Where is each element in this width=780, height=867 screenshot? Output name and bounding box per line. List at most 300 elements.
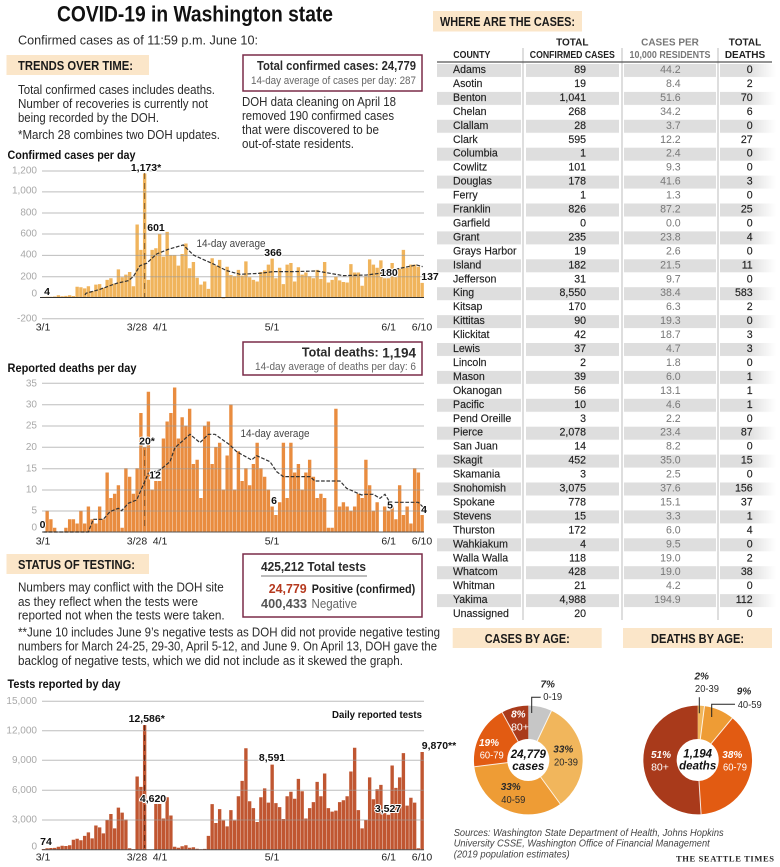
column: total deaths: 0 <box>747 580 753 592</box>
column: total confirmed cases: 89 <box>574 64 586 76</box>
y axis labels: 35 <box>26 378 37 390</box>
column: total deaths: 15 <box>741 455 753 467</box>
column: county names: Garfield <box>453 218 490 230</box>
y axis labels: 3,000 <box>12 814 37 826</box>
bar annotations: 366 <box>264 247 282 259</box>
column: total confirmed cases: 39 <box>574 371 586 383</box>
column: total deaths: 4 <box>747 231 753 243</box>
bar annotations: 0 <box>40 519 46 531</box>
text block: trends notes: Number of recoveries is currently not <box>18 97 208 111</box>
table header: COUNTY <box>453 50 491 61</box>
sources <box>454 827 724 860</box>
callout: total deaths: Total deaths: 1,194 <box>302 345 416 360</box>
column: total confirmed cases: 3 <box>580 413 586 425</box>
column: county names: Asotin <box>453 78 483 90</box>
column: total deaths: 3 <box>747 176 753 188</box>
text block: DOH data cleaning: DOH data cleaning on April 18 <box>242 95 396 109</box>
column: county names: Kitsap <box>453 301 483 313</box>
y axis labels: 600 <box>20 228 37 240</box>
callout: total confirmed cases <box>243 55 422 91</box>
bar annotations: Daily reported tests <box>332 709 422 721</box>
callout: total confirmed cases: Total confirmed cases: 24,779 <box>257 59 416 73</box>
column: total deaths: 3 <box>747 343 753 355</box>
column: cases per 10,000 residents: 12.2 <box>660 134 681 146</box>
column: total deaths: 2 <box>747 78 753 90</box>
column: total deaths: 37 <box>741 496 753 508</box>
column: total confirmed cases: 595 <box>568 134 586 146</box>
text block: testing notes: Numbers may conflict with the DOH site <box>18 581 224 595</box>
column: cases per 10,000 residents: 1.8 <box>666 357 681 369</box>
heading: deaths by age: DEATHS BY AGE: <box>651 631 744 646</box>
x axis labels <box>36 852 432 864</box>
callout: test totals: Positive (confirmed) <box>312 582 415 596</box>
column: cases per 10,000 residents: 6.3 <box>666 301 681 313</box>
slice labels: 33% <box>501 782 521 793</box>
x axis labels: 6/10 <box>412 536 432 548</box>
callout: test totals: 425,212 Total tests <box>261 560 366 574</box>
y axis labels: 12,000 <box>6 726 37 736</box>
y axis labels <box>6 696 37 852</box>
column: county names: Chelan <box>453 106 487 118</box>
slice labels: 19% <box>479 738 499 749</box>
table header: CONFIRMED CASES <box>530 50 615 61</box>
column: county names: Grays Harbor <box>453 245 517 257</box>
text block: trends notes: *March 28 combines two DOH updates. <box>18 128 220 142</box>
column: county names: Unassigned <box>453 608 509 620</box>
column: total deaths: 1 <box>747 371 753 383</box>
column: total deaths: 1 <box>747 385 753 397</box>
x axis labels <box>36 536 432 548</box>
y axis labels: -200 <box>17 314 37 324</box>
bar annotations: 601 <box>147 222 165 234</box>
column: total confirmed cases: 42 <box>574 329 586 341</box>
text block: footnote: numbers for March 24-25, 29-30, April 5-12, and June 9. On April 13, DOH gave the <box>18 640 437 654</box>
column: total deaths: 6 <box>747 106 753 118</box>
column: county names: Snohomish <box>453 482 506 494</box>
x axis labels: 5/1 <box>265 852 279 864</box>
column: total confirmed cases: 172 <box>568 524 586 536</box>
bar annotations: 137 <box>421 271 439 283</box>
bar annotations: 4 <box>421 504 427 516</box>
x axis labels: 4/1 <box>153 322 167 334</box>
donut center label: 1,194 <box>683 748 713 760</box>
y axis labels: 30 <box>26 400 37 410</box>
column: county names: Okanogan <box>453 385 502 397</box>
column: total deaths: 156 <box>735 482 753 494</box>
column: total confirmed cases: 19 <box>574 78 586 90</box>
slice labels: 51% <box>651 750 671 761</box>
column: total deaths: 11 <box>742 259 753 271</box>
x axis labels: 3/1 <box>36 852 50 864</box>
y axis labels: 200 <box>20 272 37 282</box>
column: county names: Adams <box>453 64 486 76</box>
column: total confirmed cases: 170 <box>568 301 586 313</box>
y axis labels: 0 <box>31 842 37 852</box>
slice labels: 60-79 <box>480 750 504 762</box>
column: cases per 10,000 residents: 8.4 <box>666 78 681 90</box>
column: total confirmed cases: 268 <box>568 106 586 118</box>
text block: DOH data cleaning: out-of-state residents. <box>242 137 354 151</box>
column: cases per 10,000 residents: 1.3 <box>666 190 681 202</box>
y axis labels: 1,200 <box>12 166 37 176</box>
column: total deaths: 0 <box>747 469 753 481</box>
column: total deaths: 0 <box>747 218 753 230</box>
bar annotations: 20* <box>139 436 156 448</box>
column: cases per 10,000 residents: 0.0 <box>666 218 681 230</box>
column: total deaths: 25 <box>741 204 753 216</box>
column: county names: Lincoln <box>453 357 487 369</box>
column: total confirmed cases: 4 <box>580 538 586 550</box>
sources: University CSSE, Washington Office of Financial Management <box>454 838 711 850</box>
heading: trends over time <box>6 55 149 75</box>
slice labels: 8% <box>511 710 526 720</box>
column: cases per 10,000 residents: 41.6 <box>660 176 681 188</box>
column: cases per 10,000 residents: 6.0 <box>666 524 681 536</box>
y axis labels: 5 <box>31 506 37 516</box>
column: county names: Yakima <box>453 594 488 606</box>
heading: where are the cases: WHERE ARE THE CASES: <box>440 14 575 29</box>
text block: testing notes: as they reflect when the tests were <box>18 595 198 609</box>
column: cases per 10,000 residents: 9.3 <box>666 162 681 174</box>
x axis labels: 6/1 <box>381 852 396 864</box>
column: cases per 10,000 residents: 23.4 <box>660 427 681 439</box>
y axis labels: 20 <box>26 442 37 453</box>
text block: trends notes: Total confirmed cases includes deaths. <box>18 83 215 97</box>
chart title: confirmed cases per day: Confirmed cases per day <box>8 148 136 162</box>
column: cases per 10,000 residents: 87.2 <box>660 204 681 216</box>
bar annotations: 1,173* <box>131 162 162 174</box>
column: county names: Whitman <box>453 580 495 592</box>
column: county names: Wahkiakum <box>453 538 508 550</box>
heading: cases by age <box>453 628 602 648</box>
slice labels: 7% <box>540 680 555 690</box>
slice labels: 20-39 <box>554 757 578 769</box>
column: total deaths: 2 <box>747 301 753 313</box>
y axis labels <box>26 378 37 534</box>
donut center label <box>510 749 546 773</box>
column: total confirmed cases: 56 <box>574 385 586 397</box>
bar chart: confirmed cases per day <box>12 162 439 334</box>
column: cases per 10,000 residents: 18.7 <box>660 329 681 341</box>
column: total confirmed cases: 178 <box>568 176 586 188</box>
column: cases per 10,000 residents: 194.9 <box>654 594 681 606</box>
column: cases per 10,000 residents: 19.3 <box>660 315 681 327</box>
column: total confirmed cases: 3 <box>580 469 586 481</box>
column: total confirmed cases: 37 <box>574 343 586 355</box>
slice labels: 80+ <box>651 762 669 774</box>
column: total confirmed cases: 778 <box>568 496 586 508</box>
bar annotations: 4 <box>44 286 50 298</box>
y axis labels: 25 <box>26 420 37 432</box>
callout: test totals: 400,433 <box>261 597 307 611</box>
column: cases per 10,000 residents: 2.5 <box>666 469 681 481</box>
slice labels: 2% <box>693 672 709 682</box>
x axis labels: 5/1 <box>265 536 279 548</box>
column: total deaths: 70 <box>741 92 753 104</box>
y axis labels: 0 <box>31 288 37 300</box>
y axis labels <box>12 166 37 324</box>
title: COVID-19 in Washington state <box>57 2 333 26</box>
donut center label: deaths <box>679 761 716 773</box>
column: total deaths: 0 <box>747 273 753 285</box>
x axis labels <box>36 322 432 334</box>
x axis labels: 5/1 <box>265 322 279 334</box>
bar annotations: 9,870** <box>422 740 457 752</box>
table header <box>453 38 766 61</box>
column: cases per 10,000 residents: 9.7 <box>666 273 681 285</box>
table header: TOTAL <box>729 38 761 48</box>
column: total deaths: 87 <box>741 427 753 439</box>
column: total deaths: 1 <box>747 399 753 411</box>
column: total deaths: 0 <box>747 413 753 425</box>
column: cases per 10,000 residents: 23.8 <box>660 231 681 243</box>
x axis labels: 4/1 <box>153 852 167 864</box>
x axis labels: 3/1 <box>36 322 50 334</box>
y axis labels: 10 <box>26 484 37 496</box>
column: total deaths: 0 <box>747 245 753 257</box>
y axis labels: 15,000 <box>6 696 37 707</box>
x axis labels: 6/1 <box>381 536 396 548</box>
column: total confirmed cases: 28 <box>574 120 586 132</box>
column: total deaths: 112 <box>736 594 753 606</box>
text block: DOH data cleaning: removed 190 confirmed cases <box>242 109 394 123</box>
column: county names: Pend Oreille <box>453 413 511 425</box>
table header: 10,000 RESIDENTS <box>630 50 711 61</box>
chart title: reported deaths per day: Reported deaths per day <box>8 361 137 375</box>
column: county names: Grant <box>453 231 480 243</box>
column: total deaths: 0 <box>747 357 753 369</box>
text block: DOH data cleaning <box>242 95 396 151</box>
column: county names: Kittitas <box>453 315 485 327</box>
column: cases per 10,000 residents: 6.0 <box>666 371 681 383</box>
callout: test totals: 24,779 <box>269 582 307 596</box>
text block: testing notes: reported not when the tests were taken. <box>18 609 225 623</box>
table header: TOTAL <box>556 38 589 48</box>
table: county figures <box>437 38 776 622</box>
column: total confirmed cases: 182 <box>568 259 586 271</box>
text block: footnote: backlog of negative tests, which we did not include as it skewed the graph. <box>18 654 403 668</box>
column: cases per 10,000 residents: 44.2 <box>660 64 681 76</box>
heading: deaths by age <box>623 628 772 648</box>
column: total confirmed cases: 235 <box>568 231 586 243</box>
column: total confirmed cases: 20 <box>574 608 586 620</box>
column: total deaths: 0 <box>747 64 753 76</box>
slice labels: 0-19 <box>543 691 562 703</box>
column: total confirmed cases: 826 <box>568 204 586 216</box>
column: total deaths: 0 <box>747 190 753 202</box>
table header: CASES PER <box>641 38 700 48</box>
y axis labels: 6,000 <box>12 785 37 796</box>
bar annotations <box>44 162 439 298</box>
text block: footnote: **June 10 includes June 9’s negative tests as DOH did not provide negative testing <box>18 626 440 640</box>
column: county names: Franklin <box>453 204 491 216</box>
sources: Sources: Washington State Department of Health, Johns Hopkins <box>454 827 724 839</box>
slice labels: 40-59 <box>738 699 762 711</box>
column: total deaths: 27 <box>741 134 753 146</box>
slice labels: 38% <box>722 750 742 761</box>
heading: status of testing: STATUS OF TESTING: <box>18 557 135 572</box>
x axis labels: 3/28 <box>127 322 147 334</box>
column: total confirmed cases: 118 <box>569 552 586 564</box>
slice labels: 33% <box>553 744 573 756</box>
column: cases per 10,000 residents: 37.6 <box>660 482 681 494</box>
column: cases per 10,000 residents: 34.2 <box>660 106 681 118</box>
x axis labels: 3/28 <box>127 852 147 864</box>
column: total confirmed cases: 1 <box>580 148 586 160</box>
heading: cases by age: CASES BY AGE: <box>485 631 570 646</box>
slice labels: 9% <box>737 686 751 698</box>
column: county names: Walla Walla <box>453 552 508 564</box>
column: total confirmed cases: 10 <box>574 399 586 411</box>
column: county names: San Juan <box>453 441 498 453</box>
y axis labels: 800 <box>20 208 37 218</box>
column: county names: Clallam <box>453 120 488 132</box>
subtitle: Confirmed cases as of 11:59 p.m. June 10: <box>18 32 258 48</box>
column: total confirmed cases: 21 <box>574 580 586 592</box>
column: county names: Cowlitz <box>453 162 487 174</box>
slice labels: 80+ <box>511 721 529 733</box>
column: total confirmed cases: 3,075 <box>559 482 586 494</box>
callout: total confirmed cases: 14-day average of cases per day: 287 <box>251 75 416 87</box>
column: cases per 10,000 residents: 4.2 <box>666 580 681 592</box>
column: county names: Skamania <box>453 469 500 481</box>
column: county names: Mason <box>453 371 485 383</box>
x axis labels: 3/1 <box>36 536 50 548</box>
column: cases per 10,000 residents: 2.2 <box>666 413 681 425</box>
bar annotations: 6 <box>271 495 277 507</box>
column: total confirmed cases: 428 <box>568 566 586 578</box>
bar annotations <box>40 428 427 531</box>
x axis labels: 4/1 <box>153 536 167 548</box>
heading: where are the cases <box>433 11 582 32</box>
heading: status of testing <box>6 554 149 574</box>
callout: test totals <box>243 554 422 617</box>
column: total confirmed cases: 0 <box>580 218 586 230</box>
slice labels: 60-79 <box>723 762 747 774</box>
slice labels: 20-39 <box>695 683 719 695</box>
x axis labels: 3/28 <box>127 536 147 548</box>
text block: trends notes <box>18 83 220 142</box>
column: county names: Benton <box>453 92 487 104</box>
bar chart: tests reported by day <box>6 696 457 864</box>
column: total confirmed cases: 31 <box>574 273 586 285</box>
column: total confirmed cases: 15 <box>574 510 586 522</box>
donut center label <box>679 748 716 773</box>
donut center label: cases <box>512 761 544 773</box>
column: county names: Jefferson <box>453 273 496 285</box>
donut chart: deaths by age <box>651 672 762 814</box>
x axis labels: 6/1 <box>381 322 396 334</box>
bar annotations: 5 <box>387 500 393 512</box>
table header: DEATHS <box>725 50 766 61</box>
column: county names: Island <box>453 259 481 271</box>
column: cases per 10,000 residents: 21.5 <box>660 259 681 271</box>
bar annotations: 4,620 <box>140 793 166 805</box>
column: total deaths: 0 <box>747 538 753 550</box>
slice labels <box>479 680 578 806</box>
slice labels <box>651 672 762 774</box>
column: county names: Thurston <box>453 524 495 536</box>
column: county names: Stevens <box>453 510 491 522</box>
column: county names: Whatcom <box>453 566 498 578</box>
column: total deaths: 0 <box>747 162 753 174</box>
column: total deaths: 0 <box>747 120 753 132</box>
column: cases per 10,000 residents: 13.1 <box>660 385 681 397</box>
column: county names: Klickitat <box>453 329 490 341</box>
column: county names: Ferry <box>453 190 478 202</box>
column: county names: Clark <box>453 134 478 146</box>
bar annotations: 12 <box>149 470 161 482</box>
bar annotations: 8,591 <box>259 752 285 764</box>
column: total confirmed cases: 1,041 <box>559 92 586 104</box>
column: cases per 10,000 residents: 2.4 <box>666 148 681 160</box>
x axis labels: 6/10 <box>412 852 432 864</box>
bar chart: reported deaths per day <box>26 378 432 548</box>
bar annotations: 14-day average <box>240 428 310 440</box>
column: total deaths: 0 <box>747 148 753 160</box>
column: county names: Douglas <box>453 176 492 188</box>
column: cases per 10,000 residents: 9.5 <box>666 538 681 550</box>
callout: test totals: Negative <box>312 597 357 611</box>
bar annotations: 180 <box>380 267 398 279</box>
chart title: tests reported by day: Tests reported by day <box>8 677 121 691</box>
callout: total deaths: 14-day average of deaths per day: 6 <box>255 361 416 373</box>
column: total deaths: 0 <box>747 441 753 453</box>
column: cases per 10,000 residents: 4.7 <box>666 343 681 355</box>
text block: testing notes <box>18 581 225 623</box>
column: total confirmed cases: 452 <box>568 455 586 467</box>
column: total deaths: 583 <box>735 287 753 299</box>
column: cases per 10,000 residents: 3.7 <box>666 120 681 132</box>
column: total deaths: 1 <box>747 510 753 522</box>
column: total deaths: 0 <box>747 315 753 327</box>
column: county names: Columbia <box>453 148 498 160</box>
column: total confirmed cases: 90 <box>574 315 586 327</box>
credit: The Seattle Times: THE SEATTLE TIMES <box>676 854 774 864</box>
y axis labels: 9,000 <box>12 755 37 766</box>
text block: DOH data cleaning: that were discovered to be <box>242 123 379 137</box>
column: cases per 10,000 residents: 15.1 <box>660 496 681 508</box>
column: total deaths: 3 <box>747 329 753 341</box>
column: total deaths: 38 <box>741 566 753 578</box>
column: county names: Pierce <box>453 427 483 439</box>
column: total deaths: 2 <box>747 552 753 564</box>
column: cases per 10,000 residents: 38.4 <box>660 287 681 299</box>
donut chart: cases by age <box>474 680 578 806</box>
column: total confirmed cases: 2,078 <box>559 427 586 439</box>
column: cases per 10,000 residents: 51.6 <box>660 92 681 104</box>
y axis labels: 400 <box>20 250 37 260</box>
sources: (2019 population estimates) <box>454 848 570 860</box>
column: county names: Spokane <box>453 496 495 508</box>
column: total confirmed cases: 14 <box>574 441 586 453</box>
column: county names: Lewis <box>453 343 480 355</box>
column: total confirmed cases: 8,550 <box>559 287 586 299</box>
column: county names: Pacific <box>453 399 485 411</box>
bar annotations: 74 <box>40 836 52 848</box>
text block: footnote <box>18 626 440 668</box>
column: total confirmed cases: 19 <box>574 245 586 257</box>
column: county names: Skagit <box>453 455 482 467</box>
column: cases per 10,000 residents: 19.0 <box>660 566 681 578</box>
slice labels: 40-59 <box>501 794 525 806</box>
column: cases per 10,000 residents: 35.0 <box>660 455 681 467</box>
column: total confirmed cases: 101 <box>568 162 586 174</box>
column: cases per 10,000 residents: 19.0 <box>660 552 681 564</box>
y axis labels: 15 <box>26 464 37 474</box>
column: cases per 10,000 residents: 2.6 <box>666 245 681 257</box>
bar annotations: 3,527 <box>375 803 401 815</box>
